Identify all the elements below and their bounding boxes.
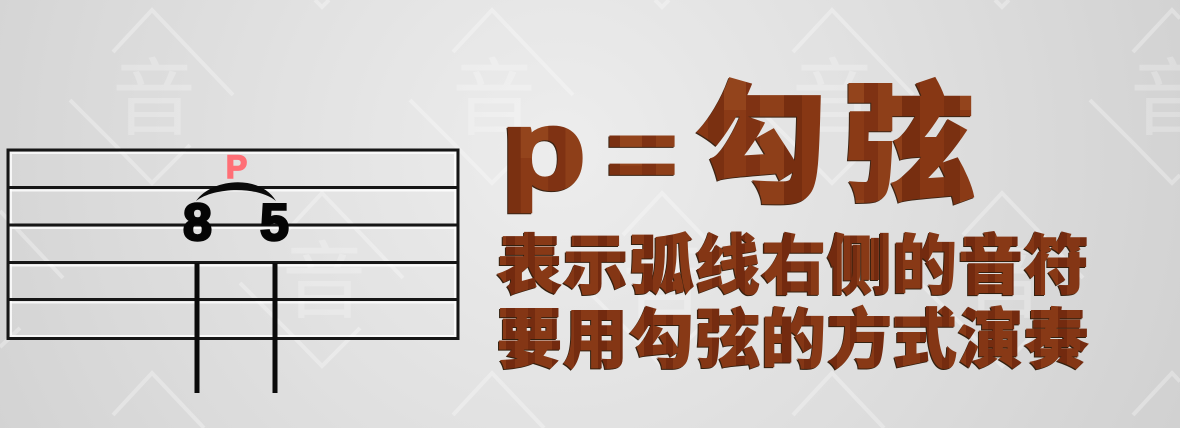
watermark pattern: 音: [112, 32, 196, 153]
explanation text: [497, 213, 1089, 381]
P mark: P: [226, 149, 247, 185]
watermark pattern: 音: [792, 32, 876, 153]
watermark pattern: 音: [452, 32, 536, 153]
equals sign: =: [604, 95, 680, 212]
letter p: p: [501, 87, 586, 212]
heading 勾弦: 勾弦: [696, 39, 974, 229]
fret number 5: 5: [260, 194, 289, 252]
pull-off arc: [196, 182, 276, 201]
staff lines: [7, 150, 458, 338]
watermark pattern: 音: [962, 215, 1046, 336]
title: p = 勾弦: [501, 39, 974, 229]
watermark pattern: 音: [282, 215, 366, 336]
fret number 8: 8: [183, 194, 212, 252]
note stems: [194, 263, 278, 393]
line 2: 要用勾弦的方式演奏: [497, 287, 1089, 381]
line 1: 表示弧线右侧的音符: [497, 213, 1089, 307]
tablature diagram: [7, 149, 458, 393]
watermark pattern: 音: [622, 215, 706, 336]
